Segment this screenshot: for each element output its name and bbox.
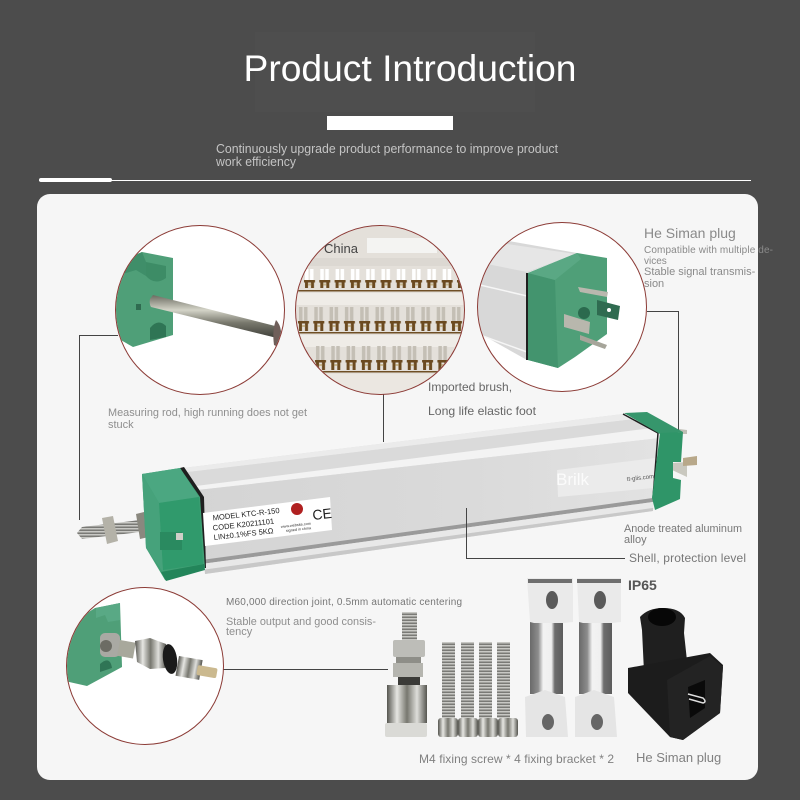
four M4 screws — [438, 642, 518, 737]
circle: measuring rod detail — [108, 226, 284, 394]
product label: MODEL KTC-R-150 — [212, 506, 280, 522]
output pins — [679, 429, 687, 434]
callout: direction joint: M60,000 direction joint, 0.5mm automatic centering — [226, 597, 462, 608]
joint — [100, 633, 120, 657]
product label: signed in china — [286, 526, 312, 533]
pins — [597, 300, 620, 320]
callout: He Siman plug: Stable signal transmis- — [644, 266, 756, 278]
black He Siman plug — [628, 608, 723, 740]
product label: CE — [312, 505, 333, 523]
subtitle: work efficiency — [215, 155, 297, 169]
aluminium body — [184, 414, 657, 574]
main sensor product image — [77, 405, 697, 581]
callout: stable output: Stable output and good consis- — [226, 616, 376, 628]
green end block — [116, 252, 173, 347]
callout: anode aluminum — [624, 523, 742, 546]
product label: CODE K20211101 — [212, 517, 275, 532]
callout: He Siman plug — [644, 225, 773, 290]
callout: He Siman plug: vices — [644, 256, 667, 267]
rod end — [273, 320, 281, 348]
measuring rod thread — [77, 520, 140, 539]
faint title watermark — [255, 32, 535, 112]
green plug block — [528, 253, 607, 368]
callout: measuring rod — [108, 407, 307, 431]
product label — [203, 497, 333, 546]
main white panel — [37, 194, 758, 780]
callout: imported brush: Long life elastic foot — [428, 404, 537, 418]
leader line: shell — [466, 508, 625, 558]
callout: measuring rod: Measuring rod, high running does not get — [108, 407, 307, 419]
callout: anode aluminum: Anode treated aluminum — [624, 523, 742, 535]
callout: imported brush: Imported brush, — [428, 380, 512, 394]
header divider — [39, 178, 751, 182]
leader lines — [80, 312, 678, 670]
callout: shell protection: Shell, protection level — [629, 551, 746, 565]
circle: He Siman plug detail — [470, 223, 646, 391]
caption: screws and brackets: M4 fixing screw * 4 fixing bracket * 2 — [419, 752, 614, 766]
callout: imported brush — [428, 380, 537, 418]
callout: He Siman plug: sion — [644, 278, 664, 290]
fixing brackets — [525, 578, 621, 737]
callout: IP65: IP65 — [628, 577, 657, 593]
subtitle: Continuously upgrade product performance to improve product — [216, 142, 559, 156]
subtitle — [215, 142, 559, 169]
callout: He Siman plug: Compatible with multiple de- — [644, 245, 773, 256]
title: Product Introduction — [244, 48, 576, 89]
main sensor product image: tt-glis.com — [627, 474, 654, 483]
callout: China: China — [324, 241, 359, 256]
circle: direction joint detail — [60, 588, 223, 744]
nuts — [102, 516, 118, 544]
measuring rod — [150, 295, 279, 338]
callout: anode aluminum: alloy — [624, 534, 647, 546]
joint product — [385, 612, 427, 737]
product label: www.website.com — [281, 522, 311, 529]
product label: LIN±0.1%FS 5KΩ — [213, 526, 274, 542]
faint body text: Brilk — [556, 470, 590, 489]
callout: He Siman plug: He Siman plug — [644, 225, 736, 241]
black seam right — [623, 414, 658, 498]
caption: plug: He Siman plug — [636, 750, 721, 765]
callout: stable output — [226, 616, 376, 638]
callout: stable output: tency — [226, 626, 253, 638]
callout: measuring rod: stuck — [108, 419, 134, 431]
left green cap — [142, 468, 205, 580]
title underline bar — [327, 116, 453, 130]
aluminium body — [470, 240, 577, 360]
circle: brush detail — [290, 226, 470, 394]
black seam — [180, 467, 206, 568]
right green cap — [624, 412, 683, 434]
